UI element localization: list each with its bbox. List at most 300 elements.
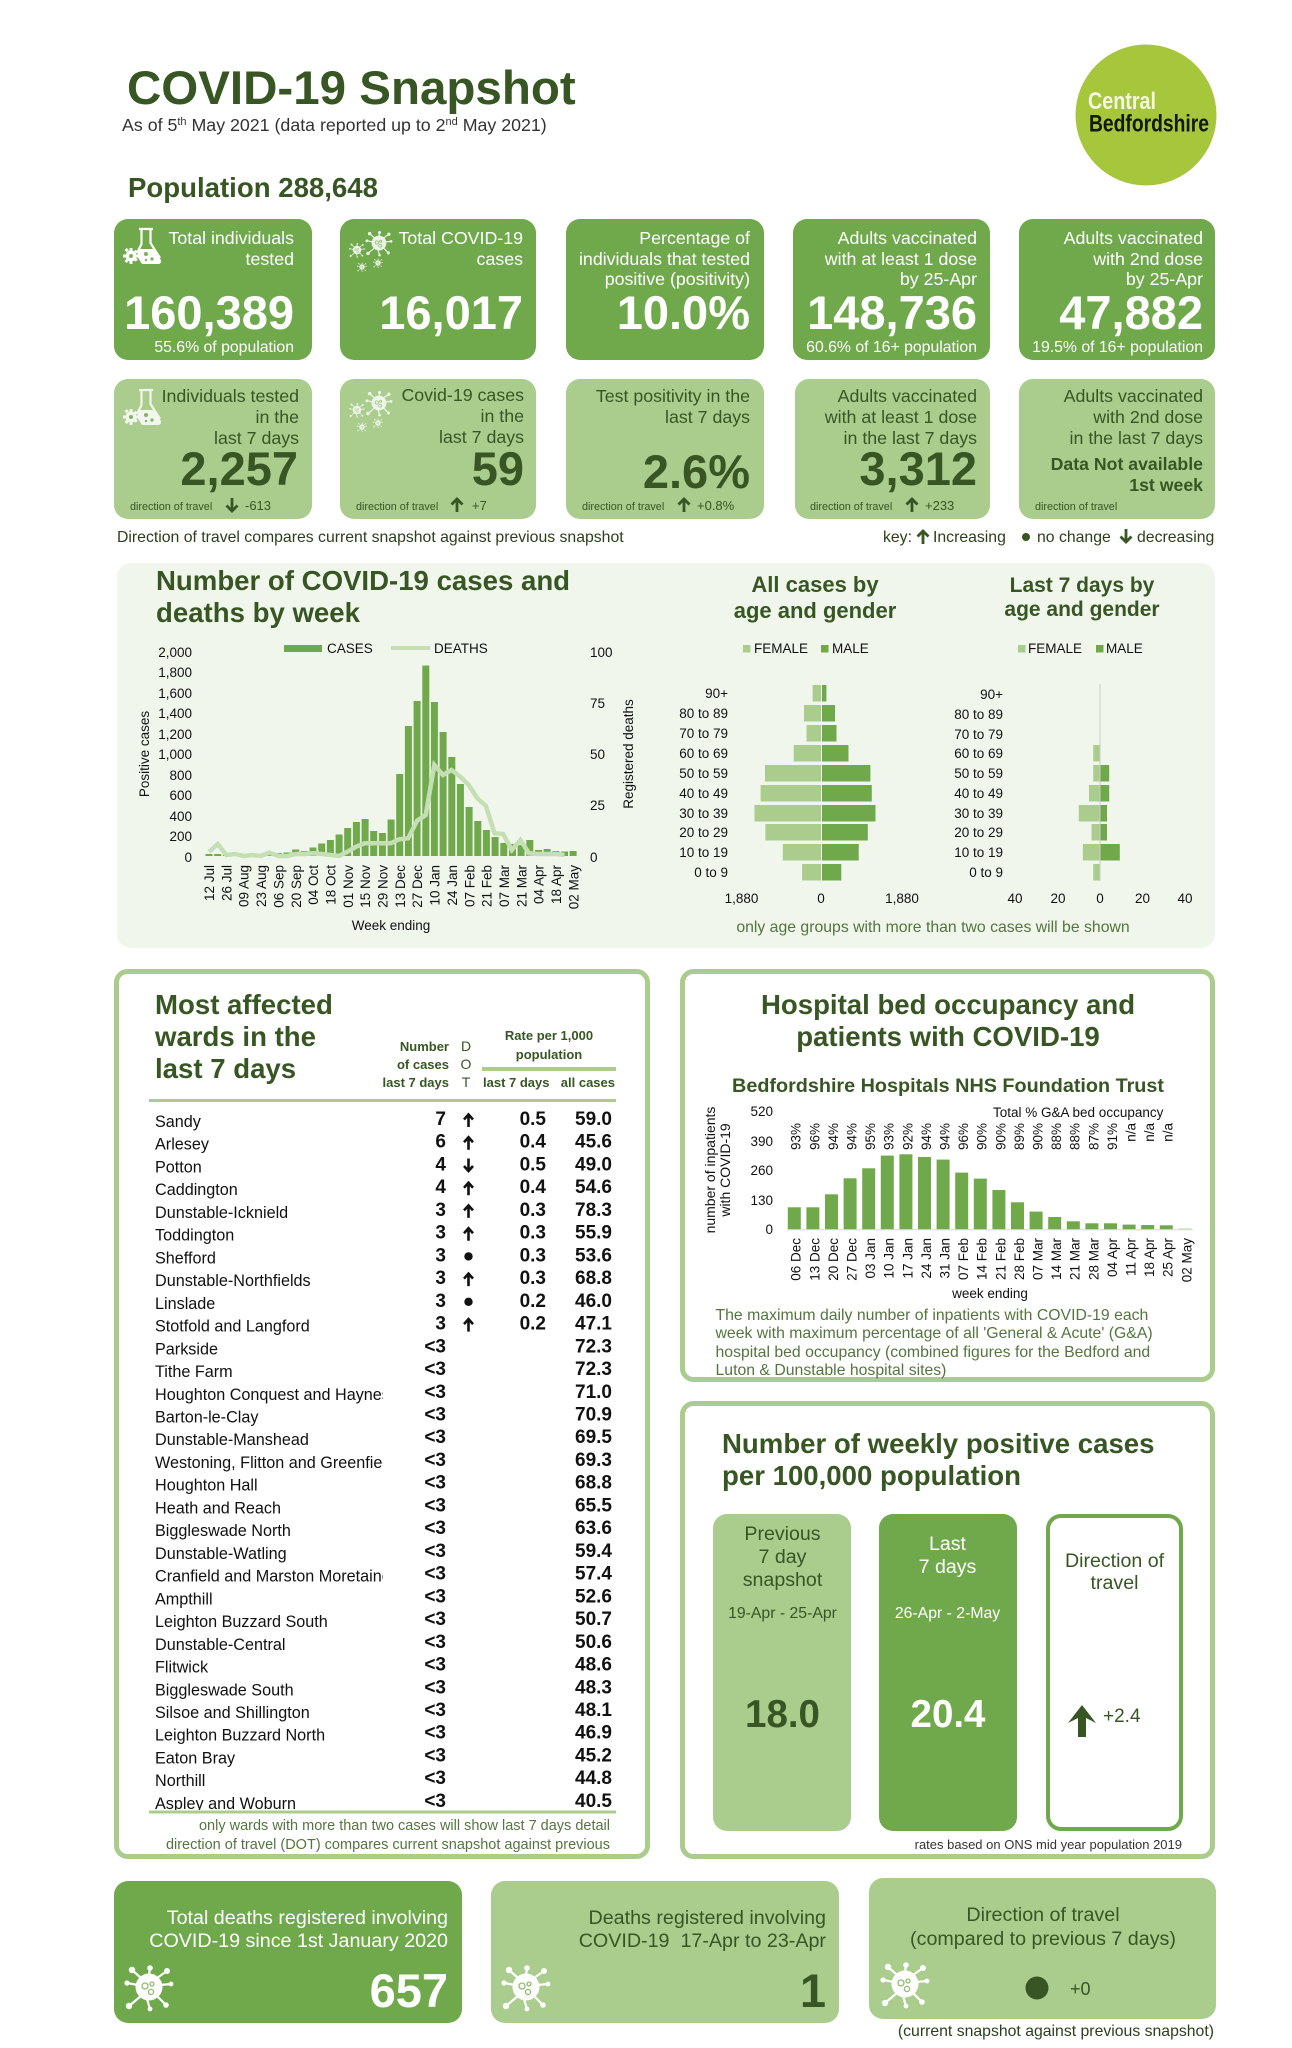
card: second dose last 7 days xyxy=(1019,379,1215,519)
ward row: Dunstable-Central: <3 xyxy=(424,1632,446,1653)
table header: last 7 days xyxy=(483,1075,550,1090)
chart axis: dates: 27 Dec xyxy=(844,1238,860,1281)
card: total individuals tested: Total individuals xyxy=(168,228,294,248)
ward table footnotes: only wards with more than two cases will show last 7 days detail xyxy=(199,1818,610,1834)
chart axis: positive cases: 1,400 xyxy=(158,706,192,721)
heading: last 7 days by age and gender: age and gender xyxy=(1004,598,1160,621)
table header: O xyxy=(461,1056,472,1072)
chart axis: week labels: 10 Jan xyxy=(428,865,443,906)
chart axis: week labels: 04 Oct xyxy=(306,865,321,905)
population pyramid: all cases: 90+ xyxy=(705,686,728,701)
ward row: Cranfield and Marston Moretaine: <3 xyxy=(424,1564,446,1585)
chart axis: week labels: 06 Sep xyxy=(271,865,286,908)
ward row: Biggleswade North: 63.6 xyxy=(575,1518,612,1539)
card: direction of travel: Direction of xyxy=(1065,1550,1165,1572)
heading: all cases by age and gender: age and gender xyxy=(734,598,897,623)
population heading: Population 288,648 xyxy=(128,172,378,203)
card: total deaths xyxy=(114,1881,462,2023)
subtitle: report date: nd xyxy=(446,116,458,128)
axis title: week ending: week ending xyxy=(951,1286,1028,1301)
ward row: Aspley and Woburn: <3 xyxy=(424,1791,446,1812)
population pyramid: all cases: 1,880 xyxy=(725,891,758,906)
note: age groups: only age groups with more than two cases will be shown xyxy=(736,919,1130,936)
ward row: Dunstable-Central: Dunstable-Central xyxy=(155,1636,285,1654)
ward row: Caddington: 54.6 xyxy=(575,1177,612,1198)
ward row: Cranfield and Marston Moretaine: Cranfield and Marston Moretaine xyxy=(155,1568,391,1586)
chart label: bed occupancy percent: 94% xyxy=(844,1123,860,1150)
ward row: Dunstable-Manshead: 69.5 xyxy=(575,1427,612,1448)
ward row: Dunstable-Northfields: 0.3 xyxy=(520,1268,546,1289)
card: cases last 7 days xyxy=(340,379,536,519)
population pyramid: last 7 days: 10 to 19 xyxy=(954,845,1003,860)
ward row: Barton-le-Clay: <3 xyxy=(424,1404,446,1426)
card: second dose last 7 days: 1st week xyxy=(1129,475,1203,495)
ward row: Toddington: 55.9 xyxy=(575,1223,612,1244)
chart axis: week labels: 29 Nov xyxy=(376,865,390,908)
ward row: Dunstable-Icknield: 78.3 xyxy=(575,1200,612,1221)
ward row: Leighton Buzzard South xyxy=(156,1612,612,1630)
heading: cases and deaths: deaths by week xyxy=(156,597,361,628)
chart label: bed occupancy percent: Total % G&A bed occupancy xyxy=(993,1105,1164,1120)
heading: weekly cases: Number of weekly positive cases xyxy=(722,1428,1154,1459)
ward row: Linslade xyxy=(156,1294,612,1309)
ward row: Northill: Northill xyxy=(155,1772,205,1790)
ward row: Dunstable-Central: 50.6 xyxy=(575,1632,612,1653)
ward row: Sandy: 7 xyxy=(435,1109,446,1130)
ward row: Potton: Potton xyxy=(155,1158,202,1176)
card: total COVID-19 cases: Total COVID-19 xyxy=(398,228,523,248)
ward row: Flitwick xyxy=(156,1657,612,1672)
card: cases last 7 days: 59 xyxy=(472,442,524,495)
card: first dose last 7 days: in the last 7 days xyxy=(844,428,977,448)
population pyramid: last 7 days: 30 to 39 xyxy=(954,806,1003,821)
ward row: Linslade: 3 xyxy=(435,1291,446,1312)
chart axis: dates: 14 Feb xyxy=(975,1238,990,1280)
ward row: Aspley and Woburn: Aspley and Woburn xyxy=(155,1795,296,1813)
chart label: bed occupancy percent: 94% xyxy=(938,1123,952,1150)
card: direction of travel: travel xyxy=(1091,1572,1138,1594)
chart axis: dates: 10 Jan xyxy=(882,1238,897,1279)
card: adults second dose: with 2nd dose xyxy=(1092,249,1203,269)
icon: flask xyxy=(123,229,161,264)
chart axis: inpatients: 130 xyxy=(750,1193,773,1208)
legend: last 7 days: FEMALE xyxy=(1028,641,1082,656)
chart label: bed occupancy percent: 90% xyxy=(1030,1123,1046,1150)
card: second dose last 7 days: in the last 7 days xyxy=(1070,428,1203,448)
card: total deaths: Total deaths registered involving xyxy=(167,1907,448,1929)
chart axis: positive cases: 2,000 xyxy=(158,645,192,660)
population pyramid: all cases: 0 to 9 xyxy=(694,865,728,880)
ward row: Biggleswade South: Biggleswade South xyxy=(155,1681,294,1699)
ward row: Potton: 4 xyxy=(435,1154,446,1176)
ward row: Sandy: 59.0 xyxy=(575,1109,612,1130)
arrow: increasing xyxy=(452,499,462,512)
ward row: Houghton Conquest and Haynes: Houghton Conquest and Haynes xyxy=(155,1386,390,1404)
card: total individuals tested xyxy=(114,219,312,360)
card: recent deaths xyxy=(491,1881,839,2023)
heading: most affected wards: wards in the xyxy=(154,1021,316,1052)
population pyramid: all cases xyxy=(679,685,919,906)
card: total individuals tested: 160,389 xyxy=(124,286,294,339)
chart axis: positive cases: 1,200 xyxy=(158,727,192,742)
card: total individuals tested: tested xyxy=(246,249,294,269)
ward row: Arlesey xyxy=(155,1134,612,1153)
ward row: Potton xyxy=(156,1157,612,1173)
ward row: Westoning, Flitton and Greenfield xyxy=(155,1452,612,1472)
ward row: Heath and Reach xyxy=(156,1498,612,1514)
chart axis: dates: 28 Feb xyxy=(1012,1238,1027,1280)
card: previous 7 day snapshot xyxy=(713,1514,851,1831)
icon: flask xyxy=(123,390,161,425)
chart label: bed occupancy percent: 89% xyxy=(1012,1123,1027,1150)
ward row: Westoning, Flitton and Greenfield: 69.3 xyxy=(575,1450,612,1471)
population pyramid: last 7 days: 80 to 89 xyxy=(954,707,1003,722)
ward row: Dunstable-Central xyxy=(156,1634,612,1650)
card: individuals tested last 7 days: -613 xyxy=(245,498,271,513)
chart axis: dates xyxy=(789,1237,1194,1282)
ward row: Shefford: 3 xyxy=(435,1245,446,1266)
heading: last 7 days by age and gender: Last 7 days by xyxy=(1010,574,1155,597)
population pyramid: last 7 days: 40 xyxy=(1007,891,1023,906)
chart axis: week labels: 24 Jan xyxy=(445,865,460,906)
card: first dose last 7 days xyxy=(795,379,990,519)
chart axis: week labels: 15 Nov xyxy=(358,865,373,908)
chart axis: dates: 11 Apr xyxy=(1124,1237,1138,1276)
ward row: Biggleswade North xyxy=(156,1520,612,1540)
no change dot xyxy=(1026,1976,1048,2000)
ward row: Flitwick: <3 xyxy=(424,1654,446,1676)
population pyramid: last 7 days: 40 to 49 xyxy=(954,786,1003,801)
ward row: Dunstable-Icknield xyxy=(156,1202,612,1218)
chart label: bed occupancy percent: n/a xyxy=(1142,1123,1157,1142)
ward row: Biggleswade South: 48.3 xyxy=(575,1677,612,1698)
card: deaths direction of travel: Direction of travel xyxy=(966,1904,1120,1926)
ward row: Linslade: Linslade xyxy=(155,1295,215,1313)
ward row: Shefford: 53.6 xyxy=(575,1245,612,1266)
ward row: Ampthill: Ampthill xyxy=(155,1590,213,1608)
population pyramid: last 7 days: 0 xyxy=(1096,891,1104,906)
ward row: Eaton Bray: 45.2 xyxy=(575,1745,612,1766)
card: previous 7 day snapshot: 19-Apr - 25-Apr xyxy=(728,1605,837,1622)
card: individuals tested last 7 days: direction of travel xyxy=(130,501,212,513)
note: rates source: rates based on ONS mid year population 2019 xyxy=(915,1837,1182,1852)
chart axis: week labels: 02 May xyxy=(566,865,581,909)
ward row: Cranfield and Marston Moretaine: 57.4 xyxy=(575,1564,612,1585)
ward row: Dunstable-Watling: <3 xyxy=(424,1541,446,1562)
population pyramid: all cases: 0 xyxy=(817,891,825,906)
ward row: Houghton Hall: 68.8 xyxy=(575,1473,612,1494)
ward table footnotes xyxy=(166,1818,610,1853)
card: total deaths: 657 xyxy=(370,1964,448,2017)
ward row: Eaton Bray xyxy=(156,1748,612,1767)
population pyramid: all cases: 60 to 69 xyxy=(679,746,728,761)
ward row: Houghton Conquest and Haynes: 71.0 xyxy=(575,1382,612,1403)
ward row: Tithe Farm: Tithe Farm xyxy=(155,1363,233,1381)
chart label: bed occupancy percent: 92% xyxy=(900,1123,915,1150)
card: test positivity last 7 days xyxy=(566,379,764,519)
ward row: Dunstable-Manshead: Dunstable-Manshead xyxy=(155,1431,309,1449)
ward row: Sandy xyxy=(156,1112,612,1130)
card: adults second dose: by 25-Apr xyxy=(1126,269,1203,289)
ward row: Flitwick: Flitwick xyxy=(155,1658,209,1676)
chart legend: cases and deaths: DEATHS xyxy=(434,641,488,656)
ward row: Leighton Buzzard North: Leighton Buzzard North xyxy=(155,1727,325,1745)
ward row: Cranfield and Marston Moretaine xyxy=(156,1566,612,1582)
logo: Central Bedfordshire: Bedfordshire xyxy=(1089,110,1209,138)
population pyramid: all cases: 70 to 79 xyxy=(679,726,728,741)
legend: last 7 days xyxy=(1018,641,1143,656)
ward row: Potton: 49.0 xyxy=(575,1154,612,1176)
card: last 7 days xyxy=(879,1514,1017,1831)
chart axis: registered deaths: 0 xyxy=(590,850,598,865)
chart axis: week labels: 20 Sep xyxy=(289,865,304,908)
ward row: Aspley and Woburn: 40.5 xyxy=(575,1791,612,1812)
card: test positivity last 7 days: +0.8% xyxy=(697,498,735,513)
chart label: bed occupancy percent: 94% xyxy=(919,1123,934,1150)
ward row: Biggleswade North: Biggleswade North xyxy=(155,1522,291,1540)
ward row: Parkside: 72.3 xyxy=(575,1336,612,1357)
title: COVID-19 Snapshot xyxy=(127,62,576,115)
ward row: Barton-le-Clay xyxy=(156,1407,612,1426)
chart label: bed occupancy percent: 90% xyxy=(975,1123,990,1150)
ward row: Dunstable-Watling: Dunstable-Watling xyxy=(155,1545,287,1563)
ward row: Northill: 44.8 xyxy=(575,1768,612,1789)
chart axis: positive cases: 200 xyxy=(169,829,192,844)
arrow: increasing xyxy=(906,499,918,512)
chart label: bed occupancy percent: 88% xyxy=(1049,1123,1064,1150)
ward row: Shefford: Shefford xyxy=(155,1249,216,1267)
note: snapshot comparison: (current snapshot against previous snapshot) xyxy=(898,2023,1214,2040)
ward row: Houghton Hall: <3 xyxy=(424,1473,446,1494)
axis title: week ending: Week ending xyxy=(352,918,430,933)
population pyramid: all cases: 50 to 59 xyxy=(679,766,728,781)
panel: hospital bed occupancy xyxy=(682,972,1212,1380)
ward row: Toddington xyxy=(155,1225,612,1244)
table header: D xyxy=(461,1038,471,1054)
population pyramid: last 7 days: 20 xyxy=(1135,891,1150,906)
key: direction arrows: Increasing xyxy=(933,529,1006,546)
chart axis: week labels: 07 Feb xyxy=(462,865,477,907)
chart axis: week labels: 21 Mar xyxy=(514,865,529,907)
heading: hospital: Hospital bed occupancy and xyxy=(761,989,1135,1020)
subtitle: report date: As of 5 xyxy=(122,115,177,135)
legend: all cases xyxy=(743,641,869,656)
key: direction arrows xyxy=(883,529,1214,546)
bar chart: weekly cases xyxy=(206,666,577,856)
icon: virus xyxy=(124,1965,173,2011)
ward row: Biggleswade South xyxy=(156,1680,612,1699)
card: first dose last 7 days: with at least 1 dose xyxy=(824,407,977,427)
ward row: Silsoe and Shillington xyxy=(156,1702,612,1722)
ward row: Arlesey: 45.6 xyxy=(575,1132,612,1153)
chart axis: week labels: 26 Jul xyxy=(219,865,234,901)
ward row: Leighton Buzzard North xyxy=(156,1725,612,1744)
card: individuals tested last 7 days: last 7 days xyxy=(214,428,299,448)
ward row: Linslade: 0.2 xyxy=(520,1291,546,1312)
chart axis: positive cases: 0 xyxy=(184,850,192,865)
chart axis: week labels: 04 Apr xyxy=(532,864,547,904)
card: total COVID-19 cases: 16,017 xyxy=(379,286,523,339)
table header: Rate per 1,000 xyxy=(505,1028,593,1043)
ward row: Leighton Buzzard North: 46.9 xyxy=(575,1723,612,1744)
card: positivity: Percentage of xyxy=(639,228,750,248)
ward row: Caddington xyxy=(156,1180,612,1198)
heading: hospital: patients with COVID-19 xyxy=(796,1021,1100,1052)
ward row: Biggleswade North: <3 xyxy=(424,1518,446,1539)
ward row: Ampthill xyxy=(155,1589,612,1608)
ward row: Arlesey: Arlesey xyxy=(155,1136,210,1154)
ward row: Westoning, Flitton and Greenfield: Westoning, Flitton and Greenfield xyxy=(155,1454,395,1472)
card: individuals tested last 7 days xyxy=(114,379,312,519)
ward row: Houghton Conquest and Haynes: <3 xyxy=(424,1382,446,1403)
ward row: Toddington: 0.3 xyxy=(520,1223,546,1244)
chart axis: inpatients xyxy=(702,1104,773,1237)
chart axis: registered deaths: 75 xyxy=(590,696,605,711)
subtitle: report date: May 2021) xyxy=(458,115,547,135)
key: direction arrows: decreasing xyxy=(1137,529,1214,546)
chart axis: week labels: 21 Feb xyxy=(480,865,495,907)
chart axis: registered deaths xyxy=(590,645,636,865)
chart axis: dates: 21 Mar xyxy=(1068,1238,1083,1280)
chart axis: positive cases: 800 xyxy=(169,768,192,783)
table header: all cases xyxy=(561,1075,615,1090)
ward row: Parkside: <3 xyxy=(424,1336,446,1357)
card: deaths direction of travel: +0 xyxy=(1070,1979,1091,1999)
table header: last 7 days xyxy=(382,1075,449,1090)
heading: weekly cases: per 100,000 population xyxy=(722,1460,1021,1491)
card: recent deaths: 1 xyxy=(800,1964,826,2017)
chart axis: dates: 07 Feb xyxy=(956,1238,971,1280)
ward row: Heath and Reach: 65.5 xyxy=(575,1495,612,1516)
card: adults first dose: with at least 1 dose xyxy=(824,249,977,269)
card: cases last 7 days: +7 xyxy=(472,498,487,513)
ward row: Houghton Hall: Houghton Hall xyxy=(155,1477,258,1495)
panel: most affected wards xyxy=(116,972,648,1856)
chart axis: week labels: 18 Apr xyxy=(549,864,564,904)
chart label: bed occupancy percent: n/a xyxy=(1161,1123,1176,1142)
ward row: Arlesey: 0.4 xyxy=(520,1132,546,1153)
card: last 7 days: 7 days xyxy=(919,1556,977,1578)
chart label: bed occupancy percent: 87% xyxy=(1086,1123,1101,1150)
ward row: Dunstable-Watling xyxy=(156,1544,612,1562)
line chart: weekly deaths xyxy=(209,765,564,856)
chart axis: inpatients: with COVID-19 xyxy=(717,1123,733,1218)
heading: most affected wards: last 7 days xyxy=(155,1053,296,1084)
note: direction of travel: Direction of travel compares current snapshot against previous snapshot xyxy=(117,529,624,546)
card: individuals tested last 7 days: Individuals tested xyxy=(162,386,299,406)
card: test positivity last 7 days: 2.6% xyxy=(643,445,750,498)
legend: last 7 days: MALE xyxy=(1106,641,1143,656)
hospital description: week with maximum percentage of all 'General & Acute' (G&A) xyxy=(714,1325,1153,1342)
chart axis: positive cases: 400 xyxy=(169,809,192,824)
ward row: Potton: 0.5 xyxy=(520,1154,546,1176)
key: direction arrows: key: xyxy=(883,529,912,546)
chart axis: dates: 03 Jan xyxy=(863,1238,878,1279)
chart axis: dates: 06 Dec xyxy=(789,1238,804,1281)
chart axis: registered deaths: 50 xyxy=(590,747,605,762)
chart axis: dates: 17 Jan xyxy=(900,1238,915,1279)
card: previous 7 day snapshot: snapshot xyxy=(743,1569,823,1591)
logo: Central Bedfordshire xyxy=(1076,44,1216,186)
card: previous 7 day snapshot: 7 day xyxy=(759,1546,807,1568)
card: second dose last 7 days: direction of travel xyxy=(1035,501,1117,513)
population pyramid: all cases: 80 to 89 xyxy=(679,706,728,721)
card: total COVID-19 cases: cases xyxy=(477,249,523,269)
card: adults first dose: 60.6% of 16+ population xyxy=(806,339,977,356)
chart axis: dates: 02 May xyxy=(1179,1238,1194,1282)
card: total individuals tested: 55.6% of population xyxy=(154,339,294,356)
ward row: Silsoe and Shillington: 48.1 xyxy=(575,1700,612,1721)
chart axis: dates: 20 Dec xyxy=(826,1238,841,1281)
ward row: Dunstable-Icknield: 3 xyxy=(435,1200,446,1221)
subtitle: report date: May 2021 (data reported up to 2 xyxy=(187,115,446,135)
card: recent deaths: COVID-19 17-Apr to 23-Apr xyxy=(579,1930,826,1952)
subheading: trust: Bedfordshire Hospitals NHS Foundation Trust xyxy=(732,1075,1164,1097)
population pyramid: last 7 days: 50 to 59 xyxy=(954,766,1003,781)
chart axis: positive cases: 1,000 xyxy=(158,747,192,762)
ward row: Aspley and Woburn xyxy=(155,1794,612,1810)
ward row: Leighton Buzzard South: Leighton Buzzard South xyxy=(155,1613,328,1631)
ward row: Dunstable-Manshead: <3 xyxy=(424,1427,446,1448)
card: test positivity last 7 days: Test positivity in the xyxy=(596,386,750,406)
arrow: decreasing xyxy=(226,498,238,511)
chart axis: week labels: 13 Dec xyxy=(393,865,408,908)
bar chart: inpatients xyxy=(787,1154,1193,1230)
chart axis: week labels: 18 Oct xyxy=(324,865,338,905)
chart label: bed occupancy percent: 91% xyxy=(1105,1123,1120,1150)
chart axis: dates: 07 Mar xyxy=(1030,1238,1046,1280)
table header: of cases xyxy=(397,1057,449,1072)
hospital description: hospital bed occupancy (combined figures for the Bedford and xyxy=(716,1344,1150,1361)
chart axis: positive cases: 1,800 xyxy=(158,665,192,680)
arrow: increasing xyxy=(1068,1705,1096,1737)
card: second dose last 7 days: Adults vaccinated xyxy=(1064,386,1203,406)
ward row: Northill xyxy=(156,1770,612,1786)
ward row: Leighton Buzzard South: <3 xyxy=(424,1609,446,1630)
ward row: Linslade: 46.0 xyxy=(575,1291,612,1312)
card: total COVID-19 cases xyxy=(340,219,536,360)
card: adults first dose xyxy=(793,219,990,360)
ward row: Eaton Bray: Eaton Bray xyxy=(155,1749,236,1767)
ward row: Silsoe and Shillington: <3 xyxy=(424,1700,446,1721)
card: positivity: individuals that tested xyxy=(579,249,750,269)
chart axis: dates: 21 Feb xyxy=(993,1238,1008,1280)
ward row: Westoning, Flitton and Greenfield: <3 xyxy=(424,1450,446,1471)
card: cases last 7 days: direction of travel xyxy=(356,501,438,513)
ward row: Stotfold and Langford xyxy=(156,1316,612,1335)
ward row: Flitwick: 48.6 xyxy=(575,1654,612,1676)
ward row: Leighton Buzzard North: <3 xyxy=(424,1723,446,1744)
card: adults first dose: Adults vaccinated xyxy=(838,228,977,248)
heading: most affected wards: Most affected xyxy=(155,989,333,1020)
ward row: Northill: <3 xyxy=(424,1768,446,1789)
card: recent deaths: Deaths registered involving xyxy=(589,1907,826,1929)
ward row: Eaton Bray: <3 xyxy=(424,1745,446,1766)
icon: virus xyxy=(880,1962,929,2008)
ward row: Dunstable-Northfields: Dunstable-Northfields xyxy=(155,1272,311,1290)
ward row: Parkside: Parkside xyxy=(155,1340,218,1358)
ward row: Tithe Farm: 72.3 xyxy=(575,1359,612,1380)
chart axis: inpatients: 520 xyxy=(750,1104,773,1119)
ward row: Tithe Farm xyxy=(155,1362,612,1377)
ward row: Houghton Hall xyxy=(156,1475,612,1494)
ward table footnotes: direction of travel (DOT) compares current snapshot against previous xyxy=(166,1837,610,1853)
card: last 7 days: 26-Apr - 2-May xyxy=(895,1605,1000,1622)
ward row: Stotfold and Langford: 3 xyxy=(435,1314,446,1335)
ward row: Dunstable-Northfields: 3 xyxy=(435,1268,446,1289)
ward row: Ampthill: 52.6 xyxy=(575,1586,612,1607)
table header: T xyxy=(462,1074,471,1090)
